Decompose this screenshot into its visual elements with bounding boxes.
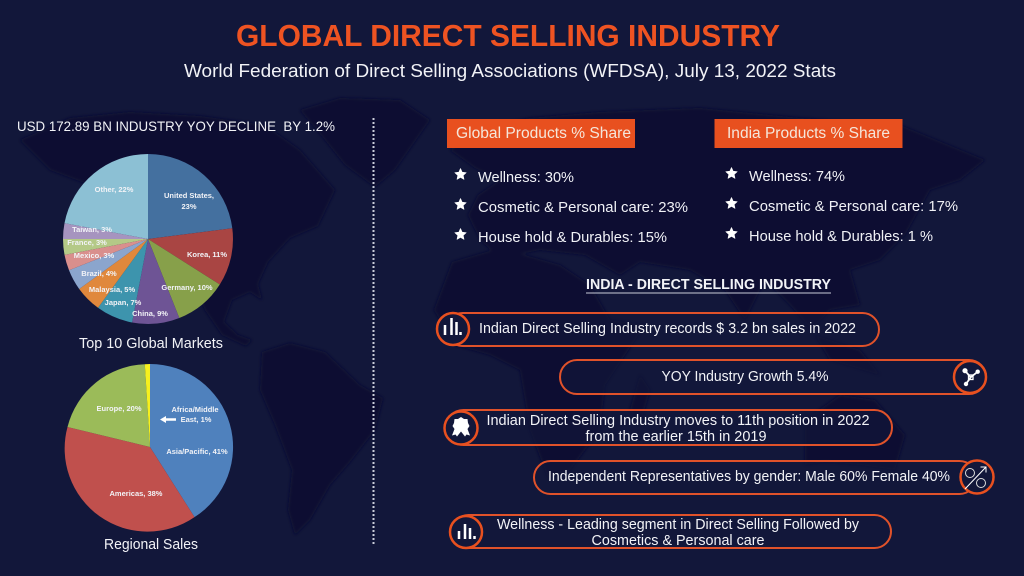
icon: currency exchange bbox=[960, 460, 994, 494]
world map background bbox=[20, 98, 985, 535]
pie chart: top 10 global markets: Japan, 7% bbox=[105, 298, 142, 307]
icon: award rosette bbox=[444, 412, 478, 444]
pie chart: top 10 global markets: France, 3% bbox=[67, 238, 107, 247]
pie chart: regional sales: Americas, 38% bbox=[110, 489, 163, 498]
pie chart: top 10 global markets: China, 9% bbox=[132, 309, 168, 318]
heading: india products bbox=[714, 119, 902, 148]
panel: global products share: Wellness: 30% bbox=[478, 169, 574, 186]
callout: yoy growth bbox=[560, 360, 986, 394]
callout: leading segment: Wellness - Leading segment in Direct Selling Followed by bbox=[497, 517, 860, 533]
callout: sales 2022: Indian Direct Selling Industry records $ 3.2 bn sales in 2022 bbox=[479, 321, 856, 337]
left panel heading: USD 172.89 BN INDUSTRY YOY DECLINE BY 1.2% bbox=[17, 118, 335, 134]
panel: global products share: House hold & Durables: 15% bbox=[478, 229, 667, 246]
heading: india direct selling industry: INDIA - DIRECT SELLING INDUSTRY bbox=[586, 277, 831, 293]
callout: representatives by gender: Independent Representatives by gender: Male 60% Female 40% bbox=[548, 469, 950, 485]
dotted divider bbox=[372, 118, 374, 546]
callout: representatives by gender bbox=[534, 460, 994, 494]
panel: india products share: Cosmetic & Personal care: 17% bbox=[749, 198, 958, 215]
callout: rank: from the earlier 15th in 2019 bbox=[586, 429, 766, 445]
pie chart: top 10 global markets: 23% bbox=[181, 202, 197, 211]
pie caption: regional sales: Regional Sales bbox=[104, 537, 198, 553]
pie chart: regional sales bbox=[65, 364, 233, 532]
callout: leading segment bbox=[450, 515, 891, 549]
pie chart: top 10 global markets: Mexico, 3% bbox=[74, 251, 115, 260]
pie chart: regional sales: East, 1% bbox=[181, 415, 212, 424]
callout: sales 2022 bbox=[437, 313, 879, 346]
arrow: africa share pointer bbox=[160, 416, 176, 423]
panel: india products share: House hold & Durables: 1 % bbox=[749, 228, 933, 245]
heading: global products bbox=[447, 119, 635, 148]
callout: rank bbox=[444, 410, 892, 445]
pie chart: top 10 global markets: United States, bbox=[164, 191, 214, 200]
callout: yoy growth: YOY Industry Growth 5.4% bbox=[662, 369, 829, 385]
pie chart: top 10 global markets: Korea, 11% bbox=[187, 250, 227, 259]
pie caption: top 10 global markets: Top 10 Global Markets bbox=[79, 336, 223, 352]
pie chart: top 10 global markets: Malaysia, 5% bbox=[89, 285, 135, 294]
panel: global products share bbox=[447, 119, 688, 246]
pie chart: top 10 global markets: Other, 22% bbox=[95, 185, 134, 194]
callout: rank: Indian Direct Selling Industry moves to 11th position in 2022 bbox=[486, 413, 870, 429]
pie chart: top 10 global markets: Taiwan, 3% bbox=[72, 225, 112, 234]
heading: global products: Global Products % Share bbox=[456, 125, 631, 142]
icon: bar chart bbox=[450, 516, 482, 548]
pie chart: regional sales: Europe, 20% bbox=[96, 404, 142, 413]
callout: leading segment: Cosmetics & Personal care bbox=[592, 533, 764, 549]
icon: bar chart bbox=[437, 313, 469, 345]
pie chart: top 10 global markets bbox=[63, 154, 233, 324]
pie chart: regional sales: Africa/Middle bbox=[171, 405, 219, 414]
title: GLOBAL DIRECT SELLING INDUSTRY bbox=[236, 18, 780, 53]
icon: network bbox=[954, 361, 986, 393]
pie chart: regional sales: Asia/Pacific, 41% bbox=[166, 447, 228, 456]
pie chart: top 10 global markets: Germany, 10% bbox=[161, 283, 213, 292]
panel: india products share: Wellness: 74% bbox=[749, 168, 845, 185]
panel: india products share bbox=[714, 119, 958, 245]
heading: india products: India Products % Share bbox=[727, 125, 890, 142]
panel: global products share: Cosmetic & Personal care: 23% bbox=[478, 199, 688, 216]
subtitle: World Federation of Direct Selling Associations (WFDSA), July 13, 2022 Stats bbox=[184, 60, 836, 81]
pie chart: top 10 global markets: Brazil, 4% bbox=[81, 269, 117, 278]
